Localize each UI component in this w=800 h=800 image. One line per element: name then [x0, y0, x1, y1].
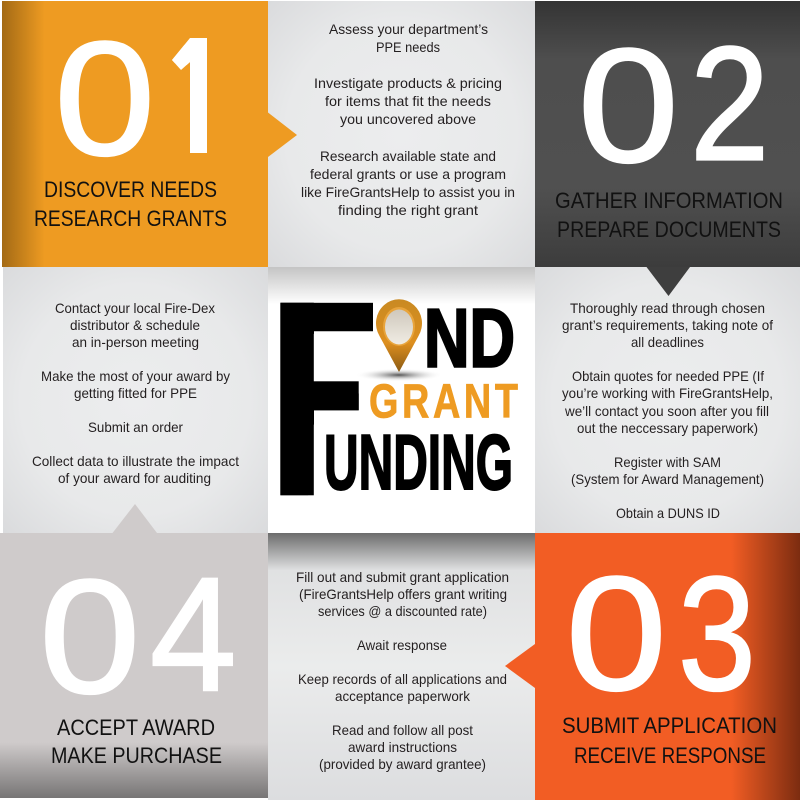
text: step 1 tasks: Investigate products & pricing	[314, 75, 502, 91]
logo: UNDING: UNDING	[324, 418, 513, 506]
text: step 2 tasks	[562, 300, 773, 521]
text: step 2 tasks: Obtain quotes for needed PPE (If	[572, 368, 764, 384]
panel: step 03	[505, 533, 800, 800]
text: step 1 tasks: Assess your department’s	[329, 21, 488, 37]
text: step 3 tasks: award instructions	[348, 739, 457, 755]
logo: big letter F	[280, 302, 373, 496]
text: step 2 tasks: out the neccessary paperwork)	[577, 420, 758, 436]
number 02: 2	[690, 14, 769, 195]
panel: submit application body	[268, 533, 535, 800]
text: step 1 tasks: Research available state and	[320, 148, 496, 164]
heading: step 02	[555, 188, 783, 242]
panel: step 02	[535, 1, 800, 296]
text: step 1 tasks: like FireGrantsHelp to assist you in	[301, 184, 515, 200]
text: step 3 tasks: Read and follow all post	[332, 722, 473, 738]
text: step 4 tasks: Submit an order	[88, 419, 183, 435]
number 03: 0	[566, 544, 667, 724]
number 03: 3	[678, 544, 756, 725]
logo: GRANT: GRANT	[369, 375, 518, 429]
heading: step 03: SUBMIT APPLICATION	[562, 713, 777, 738]
text: step 2 tasks: you’re working with FireGrantsHelp,	[562, 385, 773, 401]
number 03	[566, 544, 756, 725]
arrow: step 02 pointer	[646, 267, 690, 296]
panel: discover needs body	[268, 1, 535, 268]
heading: step 04: ACCEPT AWARD	[57, 715, 215, 740]
logo: ND: ND	[424, 292, 515, 384]
heading: step 02: GATHER INFORMATION	[555, 188, 783, 213]
text: step 1 tasks: federal grants or use a program	[310, 166, 506, 182]
text: step 4 tasks: an in-person meeting	[72, 334, 199, 350]
arrow: step 04 pointer	[112, 504, 157, 533]
text: step 4 tasks: distributor & schedule	[70, 317, 200, 333]
arrow: step 01 pointer	[268, 112, 297, 157]
number 04	[39, 543, 236, 727]
text: step 1 tasks	[301, 21, 515, 218]
text: step 3 tasks: Keep records of all applications and	[298, 671, 507, 687]
panel: step 01	[2, 1, 297, 267]
text: step 4 tasks: Make the most of your award by	[41, 368, 230, 384]
text: step 2 tasks: (System for Award Management)	[571, 471, 764, 487]
text: step 3 tasks	[296, 569, 509, 772]
text: step 2 tasks: all deadlines	[631, 334, 704, 350]
icon: map pin	[355, 299, 443, 382]
number 01	[60, 38, 207, 158]
text: step 1 tasks: for items that fit the needs	[325, 93, 491, 109]
number 01: 0	[54, 9, 155, 189]
panel: gather information body	[535, 267, 800, 533]
text: step 3 tasks: Fill out and submit grant application	[296, 569, 509, 585]
text: step 2 tasks: we’ll contact you soon after you fill	[564, 403, 769, 419]
number 04: 0	[39, 547, 140, 727]
text: step 2 tasks: Obtain a DUNS ID	[616, 505, 720, 521]
text: step 3 tasks: services @ a discounted rate)	[318, 603, 487, 619]
text: step 4 tasks: Collect data to illustrate the impact	[32, 453, 239, 469]
heading: step 04	[51, 715, 222, 768]
text: step 4 tasks	[32, 300, 239, 486]
panel: accept award body	[3, 267, 268, 533]
text: step 1 tasks: finding the right grant	[338, 202, 478, 218]
number 02: 0	[578, 16, 679, 196]
text: step 4 tasks: Contact your local Fire-Dex	[55, 300, 215, 316]
heading: step 01	[34, 177, 227, 231]
number 02	[578, 14, 769, 196]
text: step 2 tasks: grant’s requirements, taking note of	[562, 317, 773, 333]
text: step 4 tasks: of your award for auditing	[58, 470, 211, 486]
number 01: 1	[134, 9, 250, 187]
panel: center logo	[268, 267, 535, 496]
panel: step 04	[0, 504, 268, 798]
text: step 3 tasks: Await response	[357, 637, 447, 653]
heading: step 03: RECEIVE RESPONSE	[574, 743, 766, 768]
heading: step 01: RESEARCH GRANTS	[34, 206, 227, 231]
number 04: 4	[150, 543, 236, 725]
text: step 2 tasks: Register with SAM	[614, 454, 721, 470]
heading: step 01: DISCOVER NEEDS	[44, 177, 217, 202]
text: step 3 tasks: acceptance paperwork	[335, 688, 471, 704]
text: step 3 tasks: (provided by award grantee)	[319, 756, 486, 772]
text: step 4 tasks: getting fitted for PPE	[74, 385, 197, 401]
text: step 3 tasks: (FireGrantsHelp offers grant writing	[299, 586, 507, 602]
heading: step 03	[562, 713, 777, 768]
text: step 2 tasks: Thoroughly read through chosen	[570, 300, 765, 316]
text: step 1 tasks: PPE needs	[376, 39, 440, 55]
arrow: step 03 pointer	[505, 644, 535, 688]
text: step 1 tasks: you uncovered above	[340, 111, 476, 127]
heading: step 04: MAKE PURCHASE	[51, 743, 222, 768]
logo: big letter F: F	[268, 242, 384, 555]
